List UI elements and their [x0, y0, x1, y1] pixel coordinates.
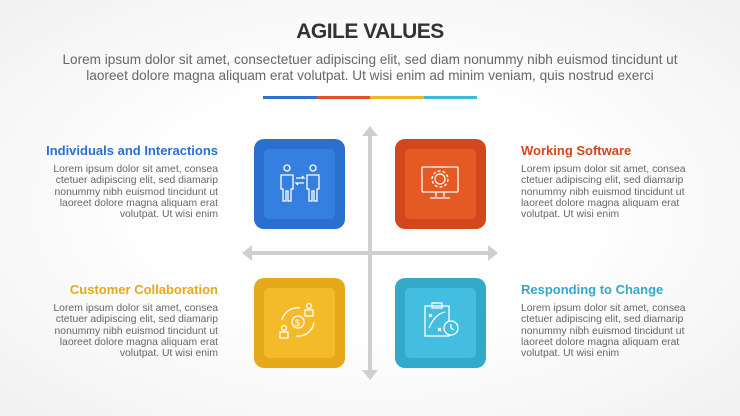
text: responding to change: Lorem ipsum dolor sit amet, consea — [521, 303, 686, 314]
text: working software: Lorem ipsum dolor sit amet, consea — [521, 164, 686, 175]
text: customer collaboration: ctetuer adipiscing elit, sed diamarip — [56, 314, 218, 325]
text: customer collaboration: Customer Collaboration — [70, 282, 218, 297]
title: AGILE VALUES — [296, 20, 444, 43]
text: customer collaboration: Lorem ipsum dolor sit amet, consea — [53, 303, 218, 314]
text: individuals: ctetuer adipiscing elit, sed diamarip — [56, 175, 218, 186]
text: working software — [521, 143, 686, 220]
text: working software: volutpat. Ut wisi enim — [521, 209, 619, 220]
subtitle: Lorem ipsum dolor sit amet, consectetuer adipiscing elit, sed diam nonummy nibh euismod tincidunt ut — [62, 52, 678, 67]
text: customer collaboration — [53, 282, 218, 359]
text: responding to change: Responding to Change — [521, 282, 663, 297]
text: customer collaboration: laoreet dolore magna aliquam erat — [60, 337, 218, 348]
box: orange — [395, 139, 486, 229]
text: individuals: volutpat. Ut wisi enim — [120, 209, 218, 220]
text: responding to change: ctetuer adipiscing elit, sed diamarip — [521, 314, 683, 325]
text: customer collaboration: nonummy nibh euismod tincidunt ut — [55, 326, 218, 337]
icon: customer money cycle — [279, 302, 315, 339]
text: individuals: Individuals and Interactions — [46, 143, 218, 158]
color bar — [263, 96, 477, 99]
icon: customer money cycle: $ — [295, 318, 300, 328]
text: working software: nonummy nibh euismod tincidunt ut — [521, 187, 684, 198]
text: working software: ctetuer adipiscing elit, sed diamarip — [521, 175, 683, 186]
text: responding to change: nonummy nibh euismod tincidunt ut — [521, 326, 684, 337]
text: working software: laoreet dolore magna aliquam erat — [521, 198, 679, 209]
box: yellow — [254, 278, 345, 368]
text: working software: Working Software — [521, 143, 631, 158]
icon: people exchange — [280, 164, 320, 202]
text: customer collaboration: volutpat. Ut wisi enim — [120, 348, 218, 359]
text: individuals: Lorem ipsum dolor sit amet, consea — [53, 164, 218, 175]
subtitle: laoreet dolore magna aliquam erat volutpat. Ut wisi enim ad minim veniam, quis nostrud exerci — [86, 68, 654, 83]
icon: clipboard clock — [424, 302, 459, 337]
text: individuals — [46, 143, 218, 220]
text: responding to change: laoreet dolore magna aliquam erat — [521, 337, 679, 348]
box: blue — [254, 139, 345, 229]
box: teal — [395, 278, 486, 368]
subtitle — [62, 52, 678, 83]
text: individuals: laoreet dolore magna aliquam erat — [60, 198, 218, 209]
text: individuals: nonummy nibh euismod tincidunt ut — [55, 187, 218, 198]
text: responding to change — [521, 282, 686, 359]
icon: monitor gear — [421, 166, 459, 199]
text: responding to change: volutpat. Ut wisi enim — [521, 348, 619, 359]
